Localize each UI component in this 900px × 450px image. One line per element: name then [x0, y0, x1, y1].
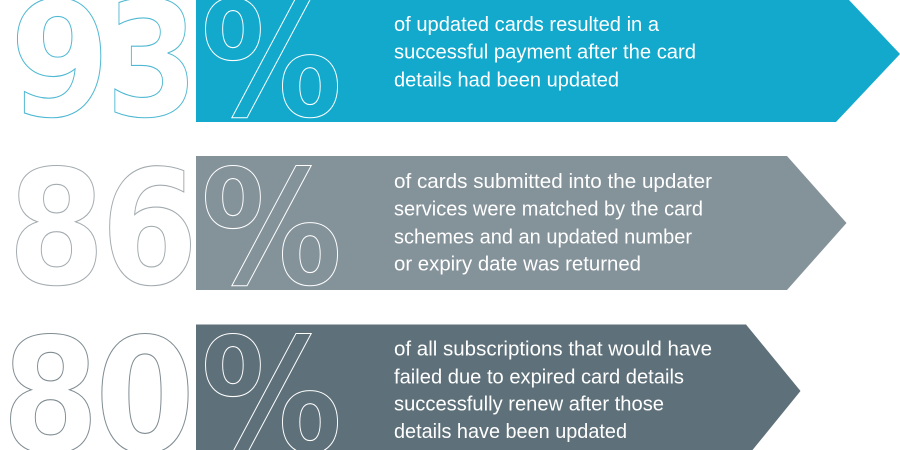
arrow: teal banner [196, 0, 900, 122]
text block: 93 percent description [394, 13, 696, 91]
arrow: grey banner [196, 156, 846, 290]
text block: 80 percent description: failed due to expired card details [394, 365, 684, 388]
text block: 86 percent description: services were matched by the card [394, 198, 703, 221]
text block: 86 percent description: or expiry date was returned [394, 253, 641, 276]
text block: 80 percent description [394, 338, 712, 443]
percent sign: % [201, 136, 342, 322]
text block: 93 percent description: details had been updated [394, 68, 619, 91]
text block: 86 percent description: of cards submitted into the updater [394, 170, 712, 193]
text block: 93 percent description: successful payment after the card [394, 41, 696, 64]
number: 86 [8, 136, 198, 322]
panel: 80 percent row [2, 304, 800, 450]
number: 86: 6 [101, 136, 198, 322]
panel: 93 percent row [10, 0, 900, 154]
text block: 80 percent description: details have been updated [394, 420, 627, 443]
panel: 86 percent row [8, 136, 846, 322]
number: 80 [2, 304, 195, 450]
text block: 86 percent description [394, 170, 712, 276]
number: 86: 8 [8, 136, 105, 322]
text block: 86 percent description: schemes and an updated number [394, 225, 692, 248]
text block: 80 percent description: successfully renew after those [394, 392, 664, 415]
text block: 93 percent description: of updated cards resulted in a [394, 13, 660, 36]
number: 93 [10, 0, 198, 154]
arrow: dark slate banner [196, 324, 800, 450]
text block: 80 percent description: of all subscriptions that would have [394, 338, 712, 361]
